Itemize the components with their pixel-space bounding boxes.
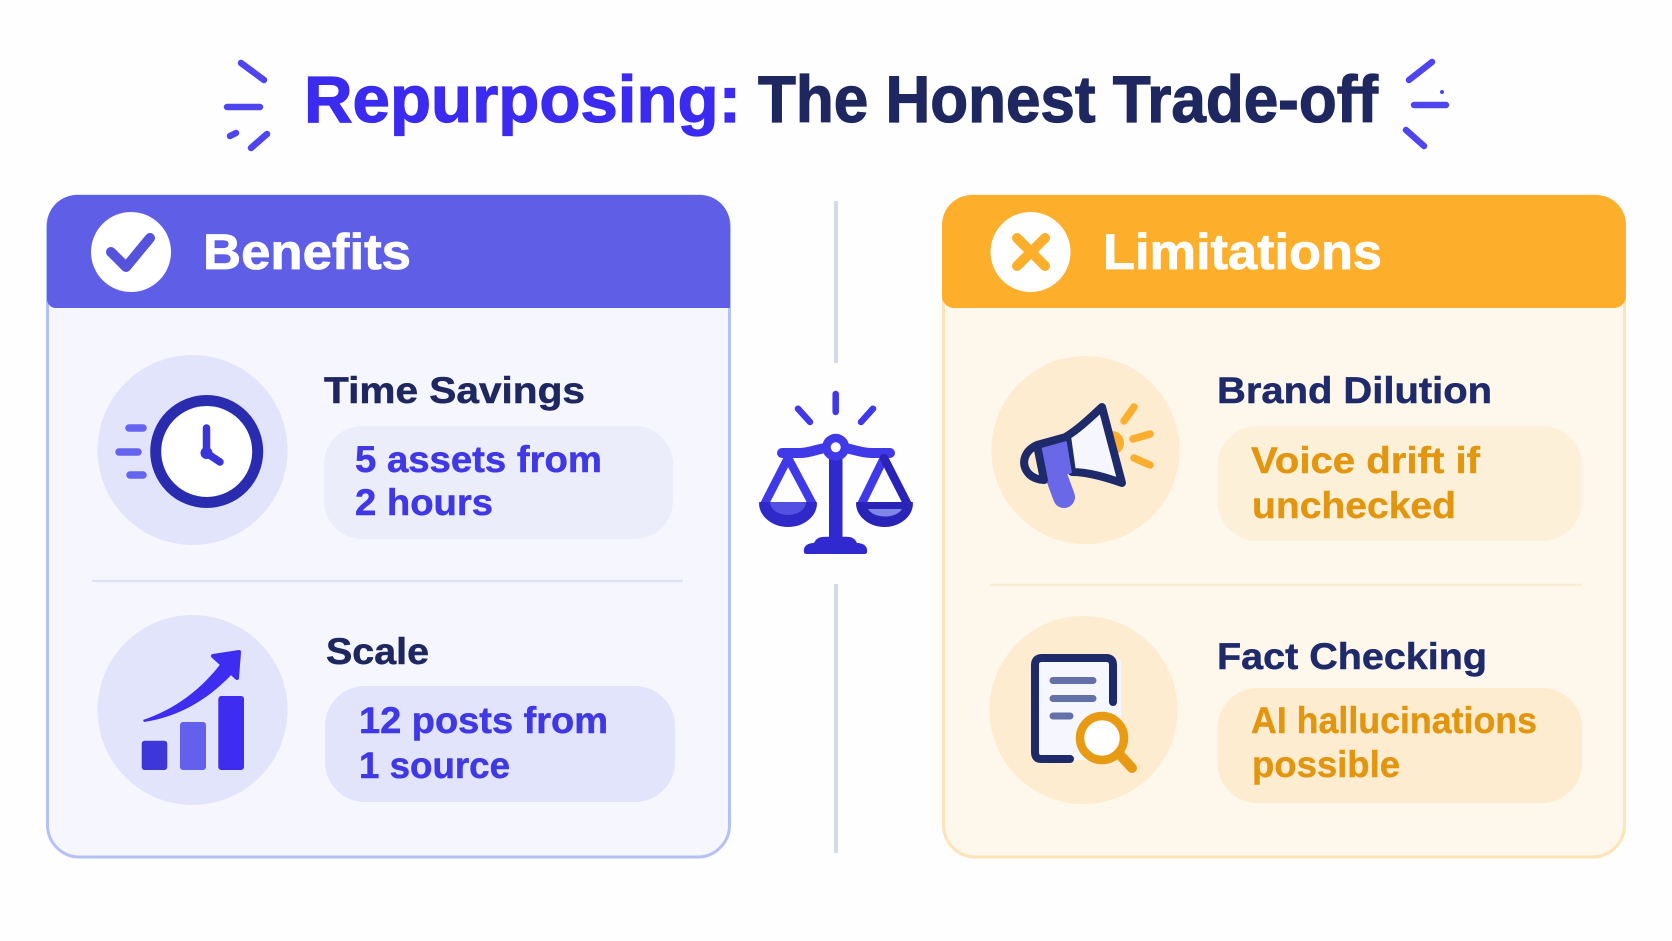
text: scale: 12 posts from — [359, 700, 608, 741]
text: brand dilution — [1217, 370, 1582, 541]
benefits header — [47, 195, 730, 308]
text: scale: Scale — [326, 631, 429, 672]
title: The Honest Trade-off — [758, 62, 1379, 136]
panel: benefits — [47, 195, 730, 857]
text: brand dilution: unchecked — [1252, 485, 1456, 526]
benefits header: Benefits — [203, 224, 411, 280]
icon: right title sparkle — [1406, 62, 1446, 146]
icon: clock — [98, 355, 288, 545]
icon: document with magnifier — [990, 616, 1178, 804]
text: brand dilution: Voice drift if — [1251, 440, 1481, 481]
center divider top — [834, 201, 838, 363]
text: fact checking: possible — [1252, 744, 1400, 785]
center divider bottom — [834, 584, 838, 853]
text: fact checking: AI hallucinations — [1251, 700, 1537, 741]
text: time savings: Time Savings — [324, 370, 585, 411]
icon: megaphone — [992, 356, 1180, 544]
icon: growth chart — [98, 615, 288, 805]
text: brand dilution: Brand Dilution — [1217, 370, 1492, 411]
text: time savings: 2 hours — [355, 482, 493, 523]
text: scale: 1 source — [359, 745, 510, 786]
title: Repurposing: — [304, 62, 741, 136]
icon: balance scale — [760, 394, 912, 554]
panel: limitations — [942, 195, 1626, 857]
text: fact checking — [1217, 636, 1582, 803]
limitations header: Limitations — [1103, 224, 1382, 280]
text: fact checking: Fact Checking — [1217, 636, 1487, 677]
limitations header — [942, 195, 1626, 308]
text: time savings — [324, 370, 673, 539]
text: scale — [325, 631, 675, 802]
title — [304, 62, 1379, 136]
text: time savings: 5 assets from — [355, 439, 602, 480]
icon: left title sparkle — [227, 63, 267, 148]
